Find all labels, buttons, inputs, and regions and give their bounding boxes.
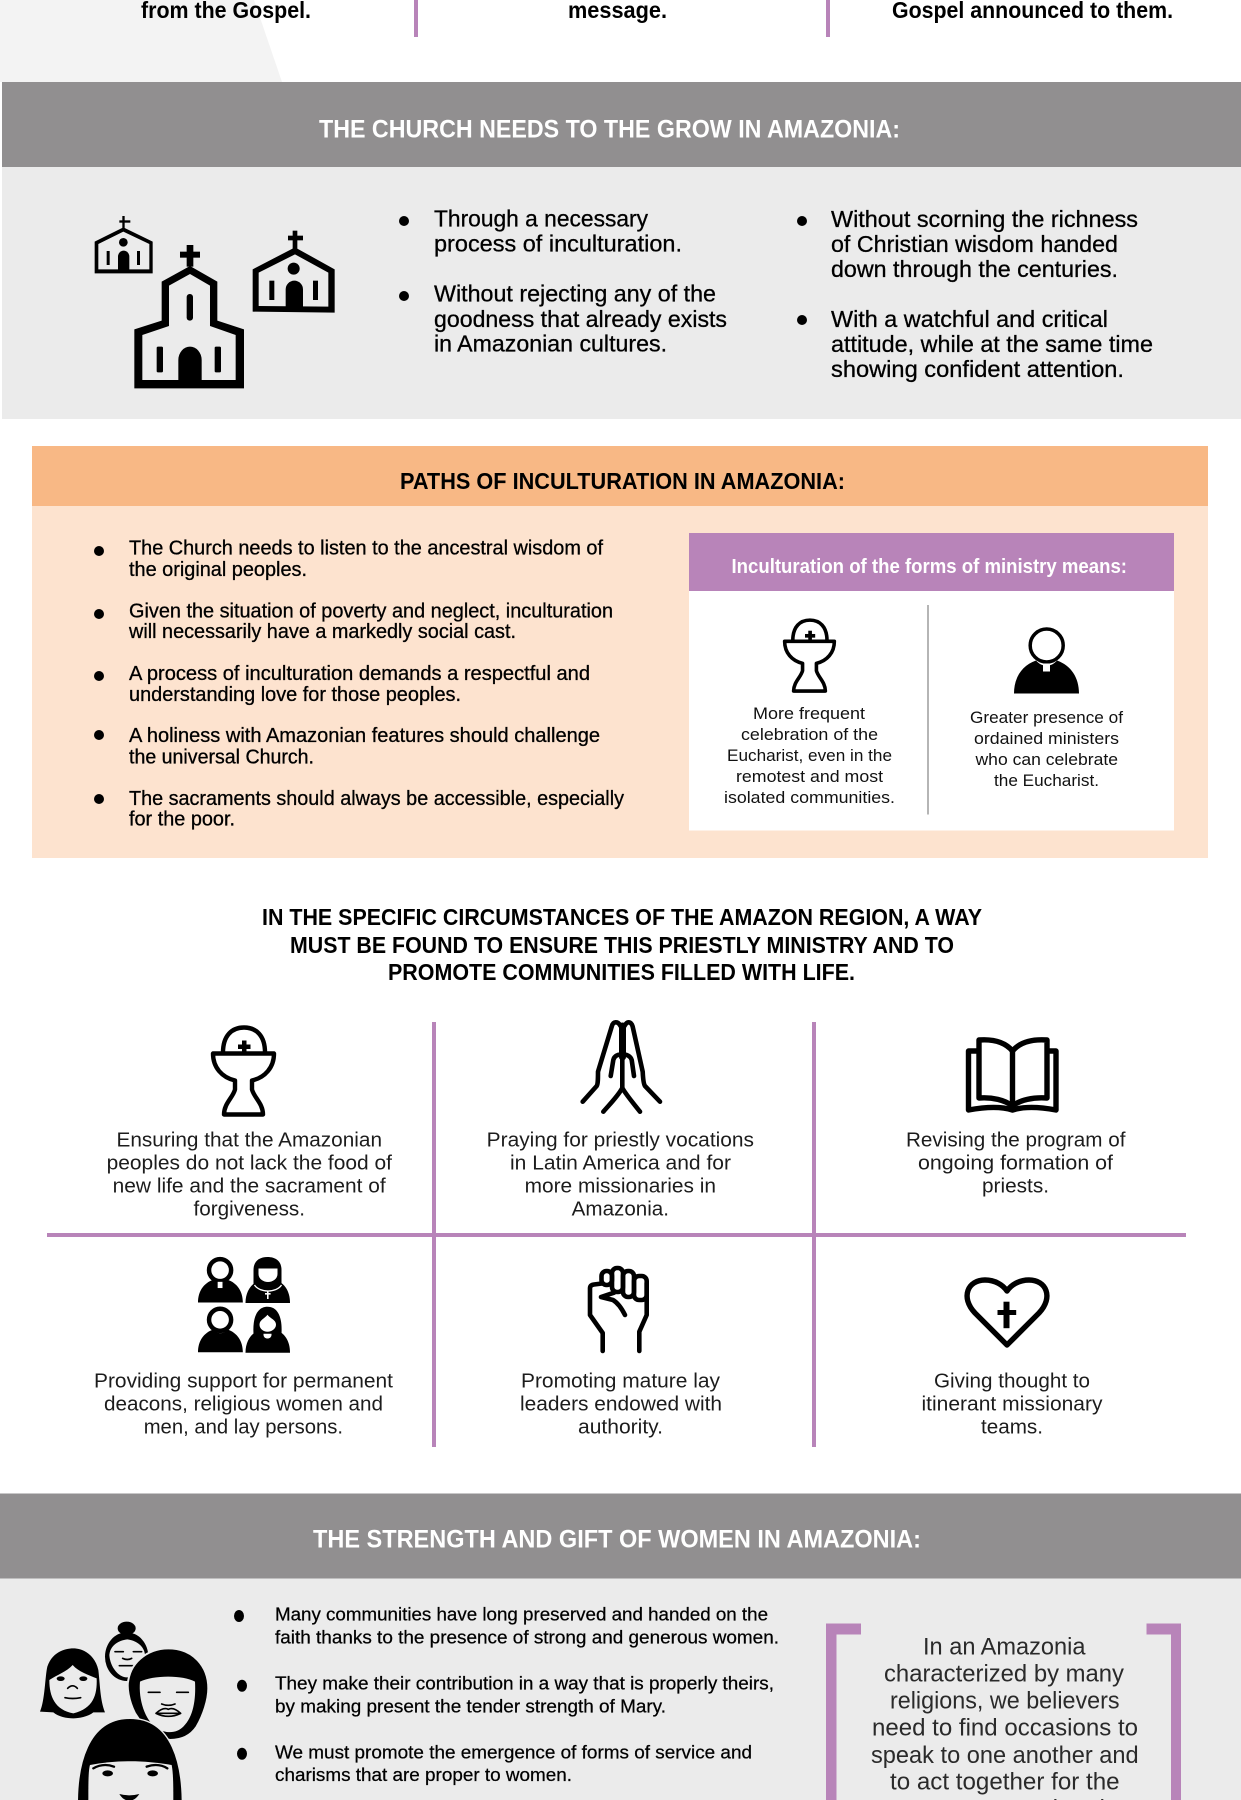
top divider 2: [826, 0, 830, 37]
quote text: [871, 1634, 1139, 1800]
text: ongoing formation: ongoing formation of: [918, 1152, 1113, 1174]
icon: chalice small: [785, 620, 834, 691]
icon: praying hands: [583, 1022, 660, 1112]
panel: paths of inculturation: [32, 446, 1208, 858]
text: priestly vocations: Praying for priestly vocations: [487, 1128, 754, 1152]
quote text: In an Amazonia: [923, 1634, 1086, 1661]
text: frequent Eucharist: [724, 704, 895, 807]
icon: open book: [968, 1040, 1056, 1110]
icon: priest: [1014, 629, 1079, 694]
icon: priest figure: [198, 1259, 243, 1303]
text: lay leaders: authority.: [578, 1415, 663, 1438]
bullet: forms of service: We must promote the emergence of forms of service and: [275, 1741, 752, 1762]
callout: quote in brackets: [826, 1624, 1181, 1800]
bullet: Christian wisdom: down through the centuries.: [831, 256, 1118, 282]
cell: priestly vocations: [487, 1022, 754, 1221]
bullet: watchful attitude: [797, 306, 1153, 382]
ministry card background: [689, 533, 1174, 830]
ministry heading: Inculturation of the forms of ministry means:: [732, 556, 1127, 578]
text: lay leaders: Promoting mature lay: [521, 1370, 721, 1393]
bullet: tender strength of Mary: They make their contribution in a way that is properly theirs,: [275, 1672, 774, 1693]
bullet: ancestral wisdom: The Church needs to listen to the ancestral wisdom of: [129, 536, 603, 560]
bullet: ancestral wisdom: the original peoples.: [129, 558, 307, 581]
bullet: inculturation process: Through a necessary: [434, 206, 648, 232]
text: food of new life: new life and the sacrament of: [113, 1174, 386, 1198]
text: lay leaders: [520, 1370, 722, 1438]
bullet: goodness in cultures: [399, 281, 727, 357]
text: food of new life: [107, 1128, 392, 1221]
top divider 1: [414, 0, 418, 37]
icon: chalice: [213, 1028, 274, 1114]
bullet: social cast: Given the situation of poverty and neglect, inculturation: [129, 600, 613, 622]
text: ordained ministers: who can celebrate: [974, 750, 1118, 769]
text: frequent Eucharist: Eucharist, even in the: [727, 746, 892, 765]
text: priestly vocations: Amazonia.: [572, 1198, 669, 1221]
bullet: sacraments: The sacraments should always be accessible, especially: [129, 787, 625, 810]
text: itinerant teams: Giving thought to: [934, 1370, 1090, 1393]
quote text: characterized by many: [884, 1661, 1125, 1688]
text: itinerant teams: teams.: [981, 1415, 1043, 1438]
quote text: religions, we believers: [890, 1688, 1120, 1715]
panel background: [32, 446, 1208, 858]
panel: inculturation of ministry: [689, 533, 1174, 830]
bullet: ancestral wisdom: [94, 536, 603, 581]
bullet: tender strength of Mary: by making present the tender strength of Mary.: [275, 1695, 666, 1716]
panel: the church needs to grow: [2, 82, 1241, 419]
bullet: forms of service: [237, 1741, 752, 1785]
bullet: goodness in cultures: goodness that already exists: [434, 306, 727, 332]
text: frequent Eucharist: remotest and most: [736, 767, 883, 786]
top row of closing text: [141, 0, 1173, 37]
bullet: respectful love: A process of inculturation demands a respectful and: [129, 662, 590, 685]
text: frequent Eucharist: More frequent: [753, 704, 865, 723]
panel body background: [2, 167, 1241, 419]
icon: group of women: [40, 1622, 208, 1800]
heading band: women: THE STRENGTH AND GIFT OF WOMEN IN AMAZONIA:: [313, 1526, 921, 1554]
text: priestly vocations: [487, 1128, 754, 1221]
icon: four people: [198, 1257, 290, 1353]
bullet: goodness in cultures: Without rejecting any of the: [434, 281, 716, 307]
heading band: church growth: THE CHURCH NEEDS TO THE GROW IN AMAZONIA:: [319, 116, 900, 144]
cell: food of new life: [107, 1028, 392, 1221]
text: priestly vocations: more missionaries in: [525, 1174, 716, 1198]
bullet: sacraments: [94, 787, 625, 830]
text: lay leaders: leaders endowed with: [520, 1393, 722, 1416]
icon: nun figure: [246, 1257, 290, 1303]
heading: priestly ministry: [262, 904, 982, 985]
heading band: women: [0, 1494, 1241, 1578]
text: support for deacons: deacons, religious women and: [104, 1393, 383, 1416]
text: ordained ministers: the Eucharist.: [994, 771, 1099, 790]
heading band: paths of inculturation: [32, 446, 1208, 506]
text: support for deacons: men, and lay persons.: [144, 1415, 343, 1438]
text: frequent Eucharist: celebration of the: [741, 725, 878, 744]
ministry heading: [689, 533, 1174, 591]
grid lines: [47, 1022, 1186, 1447]
bullet: Christian wisdom: Without scorning the richness: [831, 206, 1138, 232]
heading band: paths of inculturation: PATHS OF INCULTURATION IN AMAZONIA:: [400, 468, 845, 494]
heading: priestly ministry: PROMOTE COMMUNITIES FILLED WITH LIFE.: [388, 959, 855, 985]
bullet: watchful attitude: showing confident attention.: [831, 356, 1124, 382]
bullet: forms of service: charisms that are proper to women.: [275, 1764, 572, 1785]
bullet: watchful attitude: attitude, while at the same time: [831, 331, 1153, 357]
text: ordained ministers: [970, 708, 1123, 790]
text: ongoing formation: priests.: [982, 1174, 1049, 1198]
top background shape: [0, 0, 282, 82]
bullet: inculturation process: [399, 206, 682, 257]
grid of six ministry actions: [47, 1022, 1186, 1447]
icon: heart with cross: [967, 1280, 1047, 1345]
text: food of new life: forgiveness.: [194, 1198, 305, 1221]
bullet: respectful love: understanding love for those peoples.: [129, 683, 461, 706]
cell: ongoing formation: [906, 1040, 1126, 1198]
text: itinerant teams: itinerant missionary: [922, 1393, 1103, 1416]
icon: lay woman figure: [246, 1307, 290, 1353]
text: food of new life: Ensuring that the Amazonian: [116, 1128, 382, 1152]
icon: three churches: [95, 216, 335, 388]
text: frequent Eucharist: isolated communities.: [724, 788, 895, 807]
ministry divider: [927, 605, 929, 814]
icon: raised fist: [590, 1268, 647, 1351]
icon: lay man figure: [198, 1309, 243, 1352]
bracket right: [1146, 1624, 1181, 1800]
bullet: goodness in cultures: in Amazonian cultures.: [434, 331, 667, 357]
bullet: inculturation process: process of inculturation.: [434, 231, 682, 257]
bullet: sacraments: for the poor.: [129, 808, 235, 830]
bullet: holiness: [94, 724, 600, 768]
heading band: church growth: [2, 82, 1241, 167]
bracket left: [826, 1624, 861, 1800]
bullet: Christian wisdom: [797, 206, 1138, 282]
text: ordained ministers: ordained ministers: [974, 729, 1119, 748]
bullet: social cast: will necessarily have a markedly social cast.: [128, 620, 516, 643]
quote text: to act together for the: [890, 1769, 1120, 1796]
bullet: holiness: A holiness with Amazonian features should challenge: [129, 724, 600, 747]
text: priestly vocations: in Latin America and for: [510, 1152, 731, 1174]
quote text: need to find occasions to: [872, 1715, 1138, 1742]
text: ongoing formation: Revising the program of: [906, 1128, 1126, 1152]
text: ordained ministers: Greater presence of: [970, 708, 1123, 727]
bullet: Christian wisdom: of Christian wisdom handed: [831, 231, 1118, 257]
heading: priestly ministry: MUST BE FOUND TO ENSURE THIS PRIESTLY MINISTRY AND TO: [290, 932, 954, 958]
heading: priestly ministry: IN THE SPECIFIC CIRCUMSTANCES OF THE AMAZON REGION, A WAY: [262, 904, 982, 930]
quote text: speak to one another and: [871, 1742, 1139, 1769]
text: support for deacons: Providing support for permanent: [94, 1370, 393, 1393]
text: support for deacons: [94, 1370, 393, 1438]
bullet: strong and generous women: faith thanks to the presence of strong and generous women.: [275, 1626, 779, 1648]
text: food of new life: peoples do not lack the food of: [107, 1152, 392, 1174]
text: ongoing formation: [906, 1128, 1126, 1198]
text: itinerant teams: [922, 1370, 1103, 1438]
bullet: strong and generous women: [234, 1604, 779, 1648]
cell: support for deacons and lay persons: [94, 1257, 393, 1438]
bullet: respectful love: [94, 662, 590, 706]
cell: itinerant teams: [922, 1280, 1103, 1438]
bullet: tender strength of Mary: [237, 1672, 774, 1716]
panel body background: [0, 1578, 1241, 1800]
bullet: strong and generous women: Many communities have long preserved and handed on the: [275, 1604, 768, 1625]
bullet: watchful attitude: With a watchful and critical: [831, 306, 1108, 332]
panel: strength and gift of women: [0, 1494, 1241, 1800]
cell: lay leaders: [520, 1268, 722, 1438]
bullet: social cast: [94, 600, 613, 643]
bullet: holiness: the universal Church.: [129, 746, 314, 768]
